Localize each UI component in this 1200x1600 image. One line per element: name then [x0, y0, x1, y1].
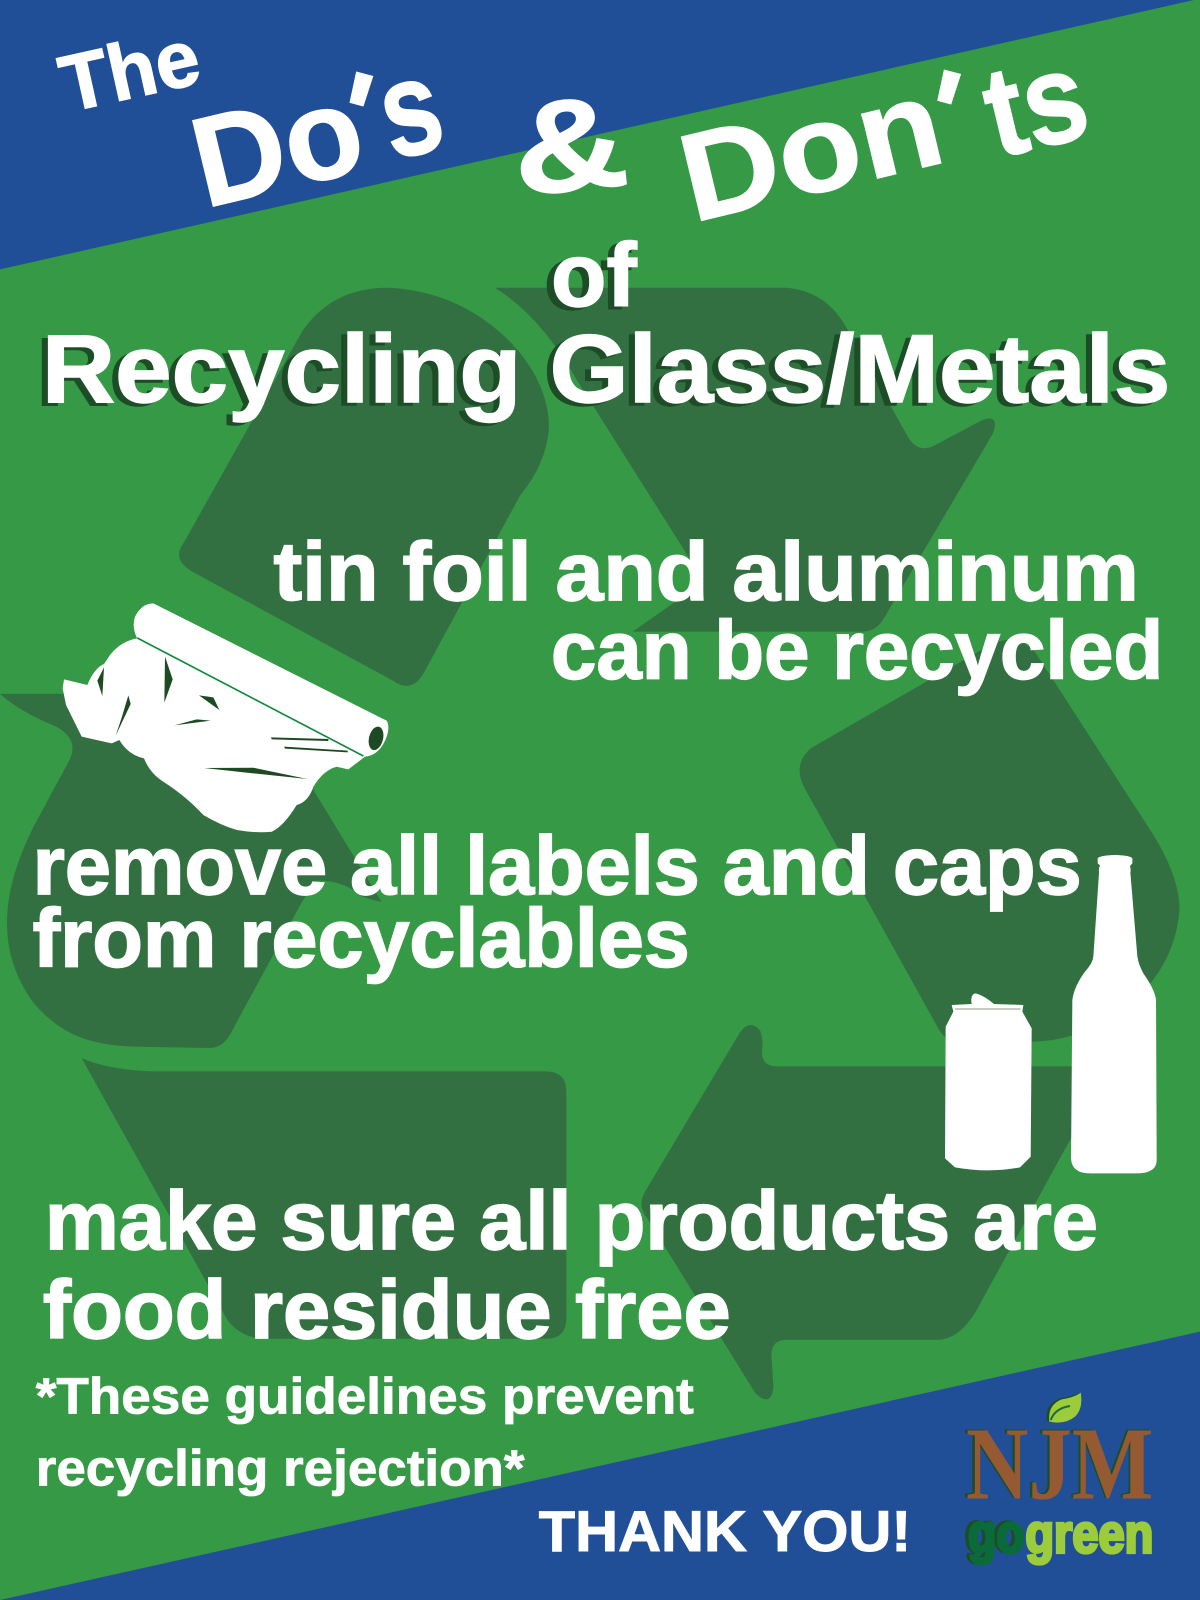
logo NJM shadow: NJM	[963, 1406, 1152, 1520]
logo go shadow: go	[965, 1502, 1021, 1564]
roll edge line	[137, 638, 363, 756]
title: Do: Do	[178, 58, 376, 235]
crumpled foil sheet	[63, 638, 365, 832]
thank you: THANK YOU!	[539, 1500, 911, 1564]
footnote	[36, 1367, 694, 1497]
logo: NJM go green	[963, 1393, 1153, 1565]
title: Don: Don	[667, 52, 955, 249]
roll hole	[366, 725, 386, 752]
top blue diagonal band	[0, 0, 1194, 269]
title: ampersand: &	[505, 67, 634, 224]
title: Do's apostrophe: '	[322, 45, 385, 185]
line 1: make sure all products are	[45, 1174, 1098, 1267]
bottom blue diagonal band	[0, 1332, 1200, 1600]
arrow: bottom left	[82, 1058, 566, 1339]
title: Don'ts apostrophe: '	[910, 43, 973, 183]
line 2: from recyclables	[33, 891, 690, 984]
logo leaf	[1047, 1393, 1081, 1423]
can body	[945, 993, 1032, 1170]
text block: make sure all products	[43, 1174, 1098, 1356]
title: The: The	[52, 12, 208, 129]
footnote line 2: recycling rejection*	[36, 1440, 525, 1497]
line 1: remove all labels and caps	[33, 819, 1082, 912]
Recycling Glass/Metals shadow: Recycling Glass/Metals	[36, 317, 1164, 426]
arrow: bottom right	[641, 1025, 1097, 1399]
foil creases	[97, 657, 348, 779]
line 2: food residue free	[43, 1263, 731, 1356]
line 2: can be recycled	[551, 604, 1163, 697]
text block: tin foil and aluminum	[273, 525, 1163, 697]
arrow: right	[800, 640, 1180, 1042]
title: ts: ts	[970, 24, 1101, 185]
Recycling Glass/Metals: Recycling Glass/Metals	[42, 314, 1170, 423]
arrow: top right	[495, 288, 995, 632]
icon: bottle	[1071, 855, 1157, 1173]
title: of Recycling Glass/Metals	[36, 226, 1170, 426]
text block: remove all labels and caps	[33, 819, 1082, 984]
of: of	[551, 226, 638, 326]
of shadow: of	[544, 229, 632, 329]
logo go: go	[968, 1503, 1025, 1565]
title	[52, 12, 1101, 249]
logo green: green	[1025, 1503, 1153, 1565]
arrow: top left	[179, 288, 549, 686]
icon: tin foil roll	[63, 603, 388, 832]
can rim line	[955, 1008, 1021, 1011]
logo NJM: NJM	[966, 1407, 1153, 1521]
arrow: left	[0, 694, 382, 1048]
icon: can	[945, 993, 1032, 1170]
bottle body	[1071, 855, 1157, 1173]
footnote line 1: *These guidelines prevent	[36, 1367, 694, 1424]
title: Do's s: s	[363, 28, 456, 188]
foil roll	[134, 603, 388, 757]
line 1: tin foil and aluminum	[273, 525, 1139, 618]
recycling symbol watermark	[0, 288, 1180, 1399]
